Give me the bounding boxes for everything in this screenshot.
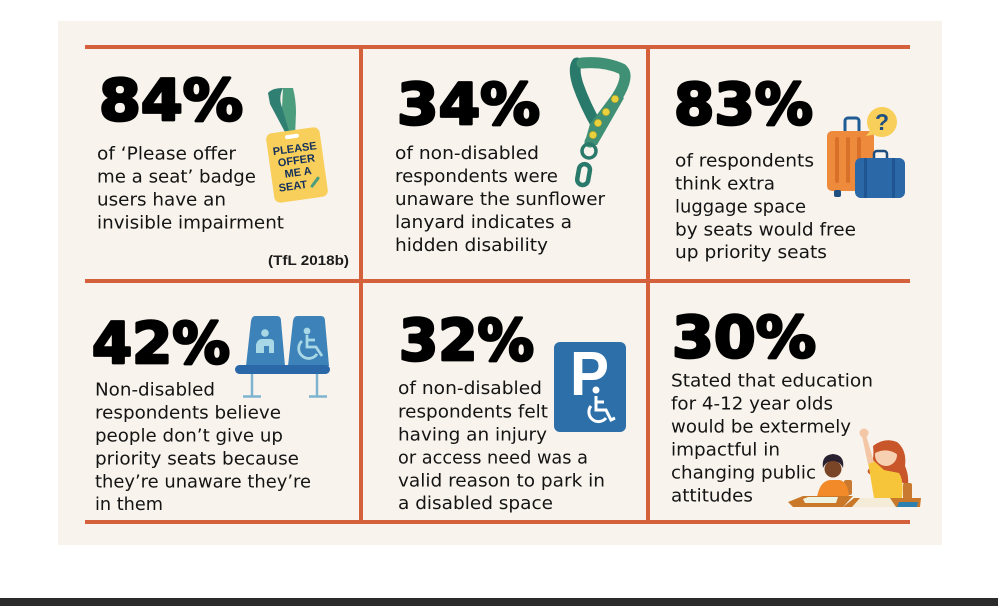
icon: badge: PLEASE [272, 140, 317, 158]
description 42%: in them [95, 494, 163, 515]
stat 83%: 83% [674, 72, 813, 138]
orange grid lines [85, 45, 910, 524]
description 32%: respondents felt [398, 402, 548, 422]
panel: 30% education [671, 305, 921, 507]
cream infographic panel [58, 21, 942, 545]
description 30%: impactful in [671, 440, 780, 460]
icon: luggage with question mark [827, 107, 905, 198]
description 34%: respondents were [395, 166, 558, 187]
description 42%: priority seats because [95, 448, 299, 470]
description 83%: up priority seats [675, 242, 827, 263]
panel: 42% priority seats [92, 311, 330, 515]
icon: disabled parking sign: P [570, 340, 609, 409]
description 32%: a disabled space [398, 493, 553, 514]
description 30%: attitudes [671, 486, 753, 506]
description 42%: people don’t give up [95, 426, 283, 446]
icon: luggage with question mark: ? [875, 109, 889, 135]
stat 30%: 30% [672, 305, 816, 371]
panel: 83% luggage [674, 72, 905, 263]
stat 84%: 84% [99, 68, 243, 134]
description 83%: luggage space [675, 196, 806, 218]
icon: priority seats [235, 316, 330, 396]
description 83%: think extra [675, 174, 775, 194]
citation: (TfL 2018b) [268, 253, 349, 268]
icon: badge: SEAT [278, 179, 308, 195]
description 84%: me a seat’ badge [97, 166, 256, 188]
description 34%: of non-disabled [395, 143, 539, 164]
icon: disabled parking sign [554, 340, 626, 432]
icon: badge: OFFER [277, 152, 316, 170]
description 30% [671, 370, 873, 506]
description 42%: they’re unaware they’re [95, 472, 311, 492]
icon: badge [265, 88, 329, 203]
description 30%: for 4-12 year olds [671, 394, 833, 414]
girl [860, 428, 912, 499]
boy [817, 454, 852, 497]
stat 34%: 34% [397, 72, 540, 138]
panel: 32% parking [398, 308, 626, 514]
description 42%: Non-disabled [95, 380, 215, 400]
stat 42%: 42% [92, 311, 230, 377]
description 32%: having an injury [398, 424, 547, 446]
icon: badge: ME A [284, 165, 312, 181]
description 32% [398, 378, 605, 514]
panel: 84% badge users [97, 68, 349, 268]
icon: children at desks [788, 428, 921, 507]
description 32%: valid reason to park in [398, 470, 605, 492]
description 34%: unaware the sunflower [395, 189, 606, 210]
description 32%: of non-disabled [398, 378, 542, 399]
description 84%: invisible impairment [97, 212, 284, 234]
description 83% [675, 150, 856, 263]
bottom dark bar [0, 598, 998, 606]
description 32%: or access need was a [398, 448, 588, 468]
description 84% [97, 144, 284, 234]
description 83%: of respondents [675, 150, 814, 172]
description 34% [395, 143, 606, 256]
panel: 34% lanyard [395, 63, 625, 256]
description 84%: of ‘Please offer [97, 144, 237, 164]
description 42%: respondents believe [95, 402, 281, 424]
description 30%: Stated that education [671, 370, 873, 392]
description 84%: users have an [97, 190, 226, 210]
description 42% [95, 380, 311, 515]
description 30%: would be extermely [671, 416, 851, 438]
description 30%: changing public [671, 462, 816, 484]
stat 32%: 32% [399, 308, 534, 374]
description 34%: lanyard indicates a [395, 212, 572, 233]
description 34%: hidden disability [395, 235, 548, 256]
icon: sunflower lanyard [575, 63, 625, 186]
description 83%: by seats would free [675, 220, 856, 240]
desks [788, 496, 921, 507]
